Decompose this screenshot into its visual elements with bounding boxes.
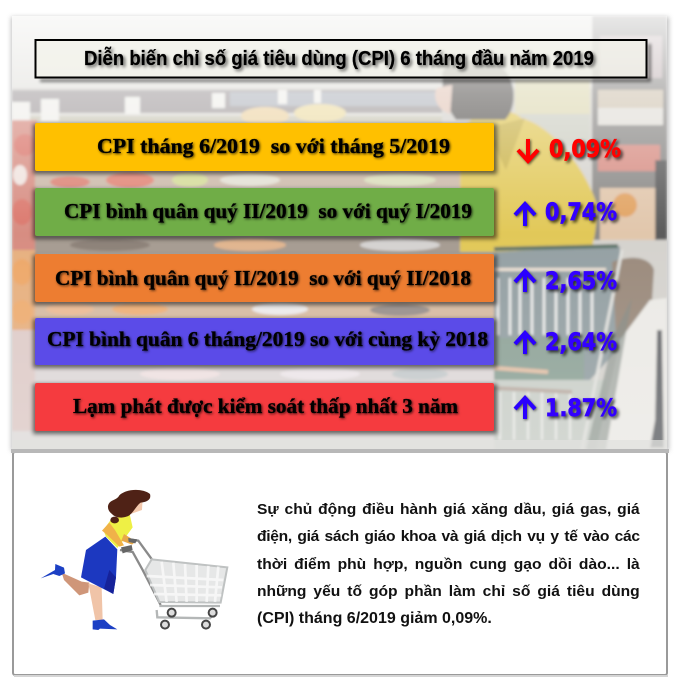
explanatory paragraph: thời điểm phù hợp, nguồn cung gạo dồi dào... là <box>257 556 640 573</box>
cart basket <box>145 559 227 603</box>
explanatory paragraph: những yếu tố góp phần làm chỉ số giá tiêu dùng <box>257 583 640 600</box>
row 3: quarter on year <box>33 254 617 305</box>
row 5 value: 1.87% <box>545 394 617 422</box>
hands <box>121 538 137 553</box>
icon: blue up arrow <box>515 204 535 226</box>
yellow top <box>103 513 133 548</box>
white photo wash <box>12 16 667 450</box>
icon: blue up arrow <box>515 398 535 419</box>
row 2: quarter on quarter <box>33 188 617 239</box>
icon: blue up arrow <box>515 333 535 354</box>
row 2 value: 0,74% <box>545 198 617 226</box>
shopping cart <box>494 246 622 380</box>
row 2 label: CPI bình quân quý II/2019 so với quý I/2019 <box>64 199 472 223</box>
row 1: CPI month on month <box>33 123 621 174</box>
explanatory paragraph: (CPI) tháng 6/2019 giảm 0,09%. <box>257 610 492 627</box>
illustration: woman pushing shopping cart <box>41 490 227 630</box>
explanatory paragraph: Sự chủ động điều hành giá xăng dầu, giá gas, giá <box>257 501 640 518</box>
background supermarket photo <box>12 16 667 450</box>
title text: Diễn biến chỉ số giá tiêu dùng (CPI) 6 tháng đầu năm 2019 <box>84 46 594 70</box>
row 4 label: CPI bình quân 6 tháng/2019 so với cùng kỳ 2018 <box>47 327 488 351</box>
produce blobs <box>241 107 289 125</box>
cart handle <box>120 539 161 605</box>
floor <box>599 298 667 440</box>
bottom white panel <box>11 449 669 677</box>
soft shadow around photo panel <box>11 17 669 451</box>
row 3 label: CPI bình quân quý II/2019 so với quý II/2018 <box>55 266 471 290</box>
row 4: six months on year <box>33 318 617 368</box>
row 3 value: 2,65% <box>545 267 617 295</box>
cart wheels <box>161 609 217 629</box>
front shoe <box>93 619 117 630</box>
head <box>129 498 143 514</box>
row 4 value: 2,64% <box>545 328 617 356</box>
hair <box>108 490 150 518</box>
shelf labels <box>12 102 30 120</box>
shopper in yellow coat <box>460 110 597 252</box>
row 1 value: 0,09% <box>549 135 621 163</box>
rear shoe <box>41 564 65 578</box>
row 1 label: CPI tháng 6/2019 so với tháng 5/2019 <box>97 134 450 158</box>
right side shelves <box>340 45 595 80</box>
cart base <box>157 606 220 618</box>
row 5: inflation <box>33 383 617 434</box>
skirt <box>81 537 117 594</box>
title box <box>36 40 651 82</box>
row 5 label: Lạm phát được kiểm soát thấp nhất 3 năm <box>73 394 458 418</box>
explanatory paragraph <box>257 501 640 627</box>
explanatory paragraph: điện, giá sách giáo khoa và giá dịch vụ y tế vào các <box>257 528 640 545</box>
icon: red down arrow <box>518 139 538 161</box>
icon: blue up arrow <box>515 271 535 292</box>
rear leg <box>62 573 89 595</box>
standing leg <box>88 583 103 620</box>
